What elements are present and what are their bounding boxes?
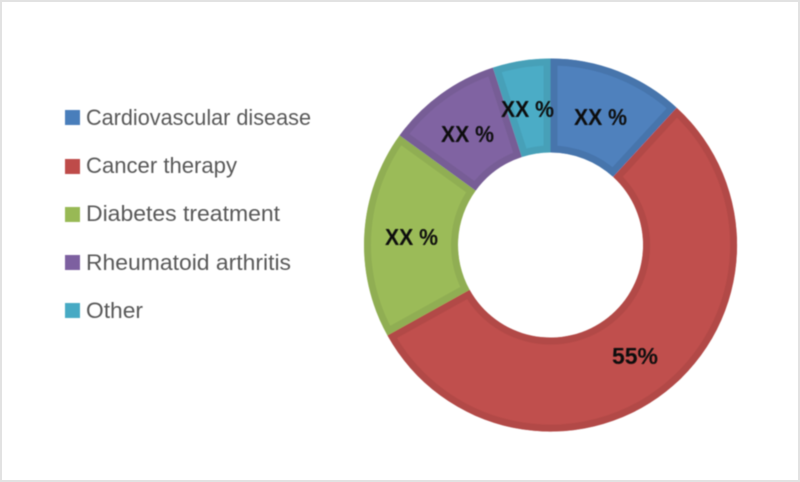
- slice: Cardiovascular disease: [550, 58, 677, 177]
- label: Rheumatoid value: XX %: [441, 121, 494, 147]
- slice: Other: [493, 58, 550, 157]
- legend item: Other: Other: [86, 298, 143, 323]
- legend item: Cancer therapy: Cancer therapy: [86, 153, 237, 178]
- slice: Diabetes treatment: [364, 135, 476, 335]
- label: Cardiovascular value: XX %: [574, 104, 627, 130]
- label: Cancer value: 55%: [612, 343, 658, 369]
- legend item: Diabetes treatment: Diabetes treatment: [86, 201, 280, 226]
- slice: Cancer therapy: [387, 108, 737, 432]
- label: Diabetes value: XX %: [385, 224, 438, 250]
- legend item: Rheumatoid arthritis: Rheumatoid arthritis: [86, 250, 291, 275]
- legend item: Cardiovascular disease: Cardiovascular disease: [86, 105, 311, 130]
- label: Other value: XX %: [501, 96, 554, 122]
- legend: [65, 105, 311, 323]
- data labels: [385, 96, 658, 369]
- donut chart: [364, 58, 737, 432]
- slice: Rheumatoid arthritis: [400, 68, 522, 191]
